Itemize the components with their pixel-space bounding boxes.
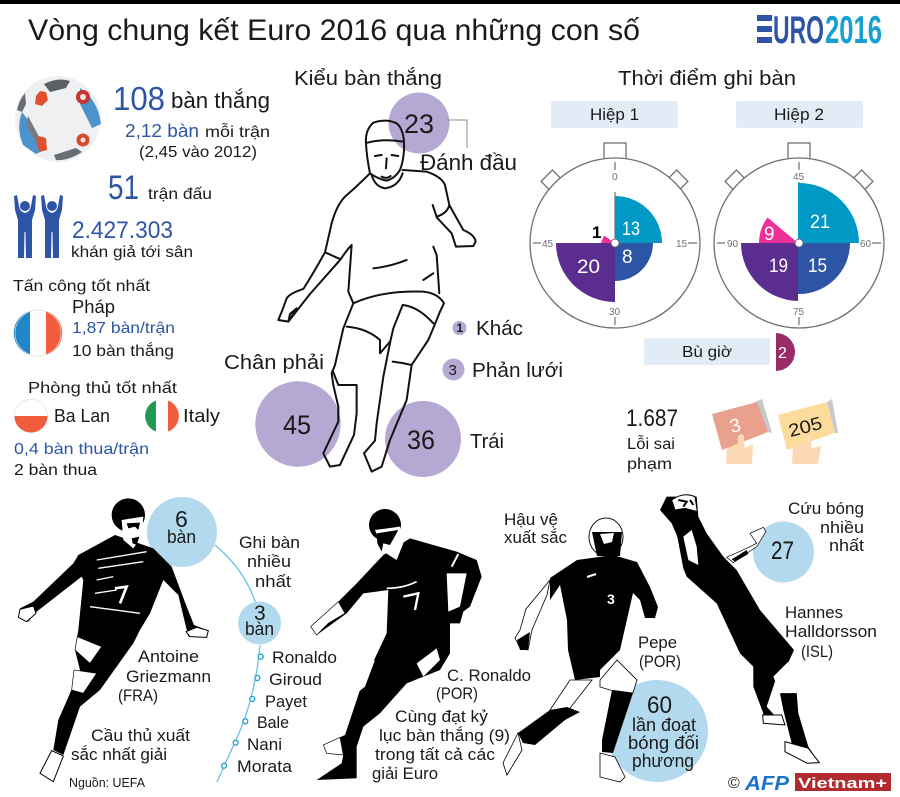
credits: AFP and Vietnam+	[728, 773, 891, 795]
stat: fouls: 1.687	[626, 405, 678, 432]
player: Griezmann	[18, 498, 208, 782]
text: France stats	[72, 297, 175, 360]
panel: overall stats	[14, 76, 270, 261]
player: Pepe: 3	[607, 591, 615, 607]
chart: second half stopwatch: 19	[769, 256, 788, 277]
player: Ronaldo	[311, 509, 482, 780]
bubble: own goal 3	[442, 358, 464, 380]
value: 3 goals: 3	[254, 602, 266, 625]
bubble: left foot 36	[385, 401, 461, 477]
icon: yellow card: 205	[786, 413, 824, 441]
heading: top scorers: nhất	[255, 572, 291, 591]
label: first half	[551, 101, 678, 128]
stat: 60 tackles: phương	[632, 751, 694, 771]
value: 27 saves: 27	[771, 537, 794, 565]
chart: second half stopwatch: 90	[727, 239, 739, 250]
chart: first half stopwatch: 8	[622, 247, 633, 268]
caption: saves: nhiều	[820, 518, 864, 537]
icon: yellow card	[778, 399, 838, 464]
stat: goals per match	[125, 121, 270, 161]
bubble: 27 saves	[753, 522, 814, 582]
label: other: Khác	[476, 318, 523, 340]
chart: second half stopwatch: 15	[808, 256, 827, 277]
caption: Ronaldo: giải Euro	[372, 764, 438, 783]
label: stoppage time	[644, 338, 770, 365]
caption: Halldorsson: (ISL)	[801, 642, 833, 661]
value: other: 1	[456, 321, 464, 335]
bubble: right foot 45	[255, 381, 341, 467]
caption: Pepe	[638, 633, 681, 671]
heading: best attack: Tấn công tốt nhất	[13, 278, 151, 295]
caption: Hậu vệ xuất sắc	[504, 510, 567, 547]
stat: 60 tackles	[628, 692, 699, 771]
caption: Ronaldo: C. Ronaldo	[447, 666, 531, 685]
title: Vòng chung kết Euro 2016 qua những con số	[28, 14, 640, 47]
text: France stats: 1,87 bàn/trận	[72, 320, 175, 337]
icon: spectators	[14, 195, 63, 258]
panel: Halldorsson	[660, 495, 877, 763]
stat: goals per match: 2,12 bàn	[125, 121, 199, 141]
caption: Griezmann	[71, 647, 211, 764]
stat: fouls: phạm	[627, 456, 672, 473]
icon: flag of France	[14, 310, 62, 356]
chart: first half stopwatch: 45	[542, 239, 554, 250]
panel: best attack	[13, 278, 175, 360]
caption: Pepe: Pepe	[638, 633, 677, 652]
credits: AFP and Vietnam+: AFP	[744, 773, 790, 795]
panel: goal types	[224, 67, 563, 477]
stat: 60 tackles: lần đoạt	[632, 715, 696, 735]
player: Pepe	[503, 518, 658, 782]
logo: Euro 2016: URO	[773, 9, 824, 52]
stat: 60 tackles: 60	[647, 692, 672, 719]
player: Halldorsson	[660, 495, 819, 763]
stat: spectators: 2.427.303	[72, 217, 173, 244]
list: scorers with 3 goals: Nani	[247, 735, 282, 754]
caption: Ronaldo	[372, 666, 531, 783]
chart: stoppage time wedge: 2	[778, 345, 787, 362]
label: second half: Hiệp 2	[774, 105, 824, 124]
list: scorers with 3 goals: Morata	[237, 757, 293, 776]
label: right foot: Chân phải	[224, 352, 324, 374]
icon: red card	[712, 399, 772, 464]
connector: headers	[447, 120, 467, 148]
heading: top scorers: Ghi bàn	[239, 533, 300, 552]
panel: Cristiano Ronaldo	[311, 509, 531, 783]
icon: football	[15, 76, 101, 162]
list: scorers with 3 goals: Giroud	[269, 670, 322, 689]
bubble: 60 tackles	[606, 680, 708, 782]
stat: total goals: 108	[113, 80, 165, 117]
chart: second half stopwatch: 60	[860, 239, 872, 250]
bubble: 3 goals	[238, 602, 281, 644]
list: scorers with 3 goals	[222, 648, 337, 776]
stat: goals per match: mỗi trận	[205, 122, 270, 141]
caption: Pepe: (POR)	[639, 652, 681, 671]
value: right foot: 45	[283, 410, 311, 440]
stat: fouls: Lỗi sai	[627, 434, 675, 453]
chart: second half stopwatch: 9	[764, 224, 775, 245]
value: 6 goals: bàn	[167, 527, 196, 547]
caption: Griezmann: Cầu thủ xuất	[91, 726, 190, 745]
icon: player outline	[278, 121, 476, 472]
panel: fouls and cards	[626, 399, 838, 473]
credits: AFP and Vietnam+: Vietnam+	[798, 775, 887, 792]
list: scorers with 3 goals: Bale	[257, 713, 289, 732]
panel: Pepe	[503, 510, 708, 782]
stat: fouls	[626, 405, 678, 473]
panel: best defence	[14, 380, 220, 479]
caption: Griezmann: Antoine	[138, 647, 199, 666]
caption: saves	[788, 499, 864, 555]
chart: first half stopwatch: 15	[676, 239, 688, 250]
text: France stats: 10 bàn thắng	[72, 341, 174, 360]
line: scorers arc	[215, 545, 260, 782]
icon: red card: 3	[728, 415, 743, 438]
stat: matches	[108, 169, 212, 207]
label: Poland: Ba Lan	[54, 406, 110, 426]
value: left foot: 36	[407, 425, 435, 455]
text: defence stats: 0,4 bàn thua/trận	[14, 441, 149, 458]
text: defence stats	[14, 441, 149, 479]
stat: matches: trận đấu	[148, 186, 212, 203]
value: own goals: 3	[448, 362, 457, 379]
caption: Ronaldo: lục bàn thắng (9)	[379, 726, 510, 745]
chart: second half stopwatch	[714, 143, 884, 328]
chart: first half stopwatch: 0	[612, 172, 618, 183]
label: second half	[736, 101, 863, 128]
stat: goals per match: (2,45 vào 2012)	[139, 144, 257, 161]
chart: second half stopwatch: 75	[793, 307, 805, 318]
chart: first half stopwatch	[530, 143, 700, 328]
label: own goals: Phản lưới	[472, 360, 563, 382]
caption: Ronaldo: trong tất cả các	[375, 745, 496, 764]
chart: second half stopwatch: 45	[793, 172, 805, 183]
bubble: headers 23	[388, 92, 450, 154]
chart: first half stopwatch: 13	[622, 219, 640, 240]
heading: best defence: Phòng thủ tốt nhất	[28, 380, 178, 397]
label: headers: Đánh đầu	[420, 150, 517, 175]
caption: Hậu vệ xuất sắc: xuất sắc	[504, 528, 567, 547]
caption: Halldorsson: Halldorsson	[785, 622, 877, 641]
stat: matches: 51	[108, 169, 139, 207]
caption: saves: Cứu bóng	[788, 499, 864, 518]
logo: Euro 2016	[757, 9, 882, 52]
stat: spectators	[71, 217, 193, 261]
caption: Griezmann: Griezmann	[126, 667, 211, 686]
value: 3 goals	[245, 602, 274, 639]
list: scorers with 3 goals: Payet	[265, 692, 307, 711]
icon: flag of Italy	[145, 400, 179, 432]
panel: top scorers	[18, 497, 337, 782]
chart: first half stopwatch: 20	[577, 257, 600, 278]
panel: scoring times	[530, 68, 884, 371]
heading: top scorers: nhiều	[247, 552, 291, 571]
label: left foot: Trái	[470, 431, 504, 453]
label: stoppage time: Bù giờ	[682, 344, 733, 361]
stat: 60 tackles: bóng đối	[628, 733, 699, 753]
stat: total goals	[113, 80, 270, 117]
list: scorers with 3 goals: Ronaldo	[272, 648, 337, 667]
bubble: other 1	[452, 321, 466, 335]
stat: total goals: bàn thắng	[171, 88, 270, 113]
caption: Halldorsson: Hannes	[785, 603, 843, 622]
text: France stats: Pháp	[72, 297, 115, 317]
value: headers: 23	[404, 109, 434, 139]
bubble: 6 goals	[147, 497, 217, 567]
chart: second half stopwatch: 21	[810, 212, 830, 233]
credits: AFP and Vietnam+: ©	[728, 775, 740, 792]
caption: Halldorsson	[785, 603, 877, 661]
icon: flag of Poland	[14, 400, 48, 432]
label: first half: Hiệp 1	[590, 105, 639, 124]
value: 6 goals: 6	[175, 506, 188, 532]
caption: Ronaldo: (POR)	[436, 684, 478, 703]
value: 3 goals: bàn	[245, 619, 274, 639]
chart: first half stopwatch: 1	[592, 223, 601, 242]
caption: Griezmann: (FRA)	[118, 686, 158, 705]
caption: Ronaldo: Cùng đạt kỷ	[395, 707, 488, 726]
caption: Griezmann: sắc nhất giải	[71, 745, 167, 764]
caption: saves: nhất	[829, 536, 864, 555]
heading: top scorers	[239, 533, 300, 591]
label: Italy: Italy	[183, 406, 220, 426]
value: 6 goals	[167, 506, 196, 547]
heading: scoring times: Thời điểm ghi bàn	[618, 68, 796, 90]
stat: spectators: khán giả tới sân	[71, 244, 193, 261]
chart: first half stopwatch: 30	[609, 307, 621, 318]
source: Nguồn: UEFA	[69, 775, 145, 790]
chart: stoppage time wedge	[776, 333, 795, 371]
heading: goal types: Kiểu bàn thắng	[294, 67, 442, 90]
text: defence stats: 2 bàn thua	[14, 462, 97, 479]
caption: Hậu vệ xuất sắc: Hậu vệ	[504, 510, 558, 529]
